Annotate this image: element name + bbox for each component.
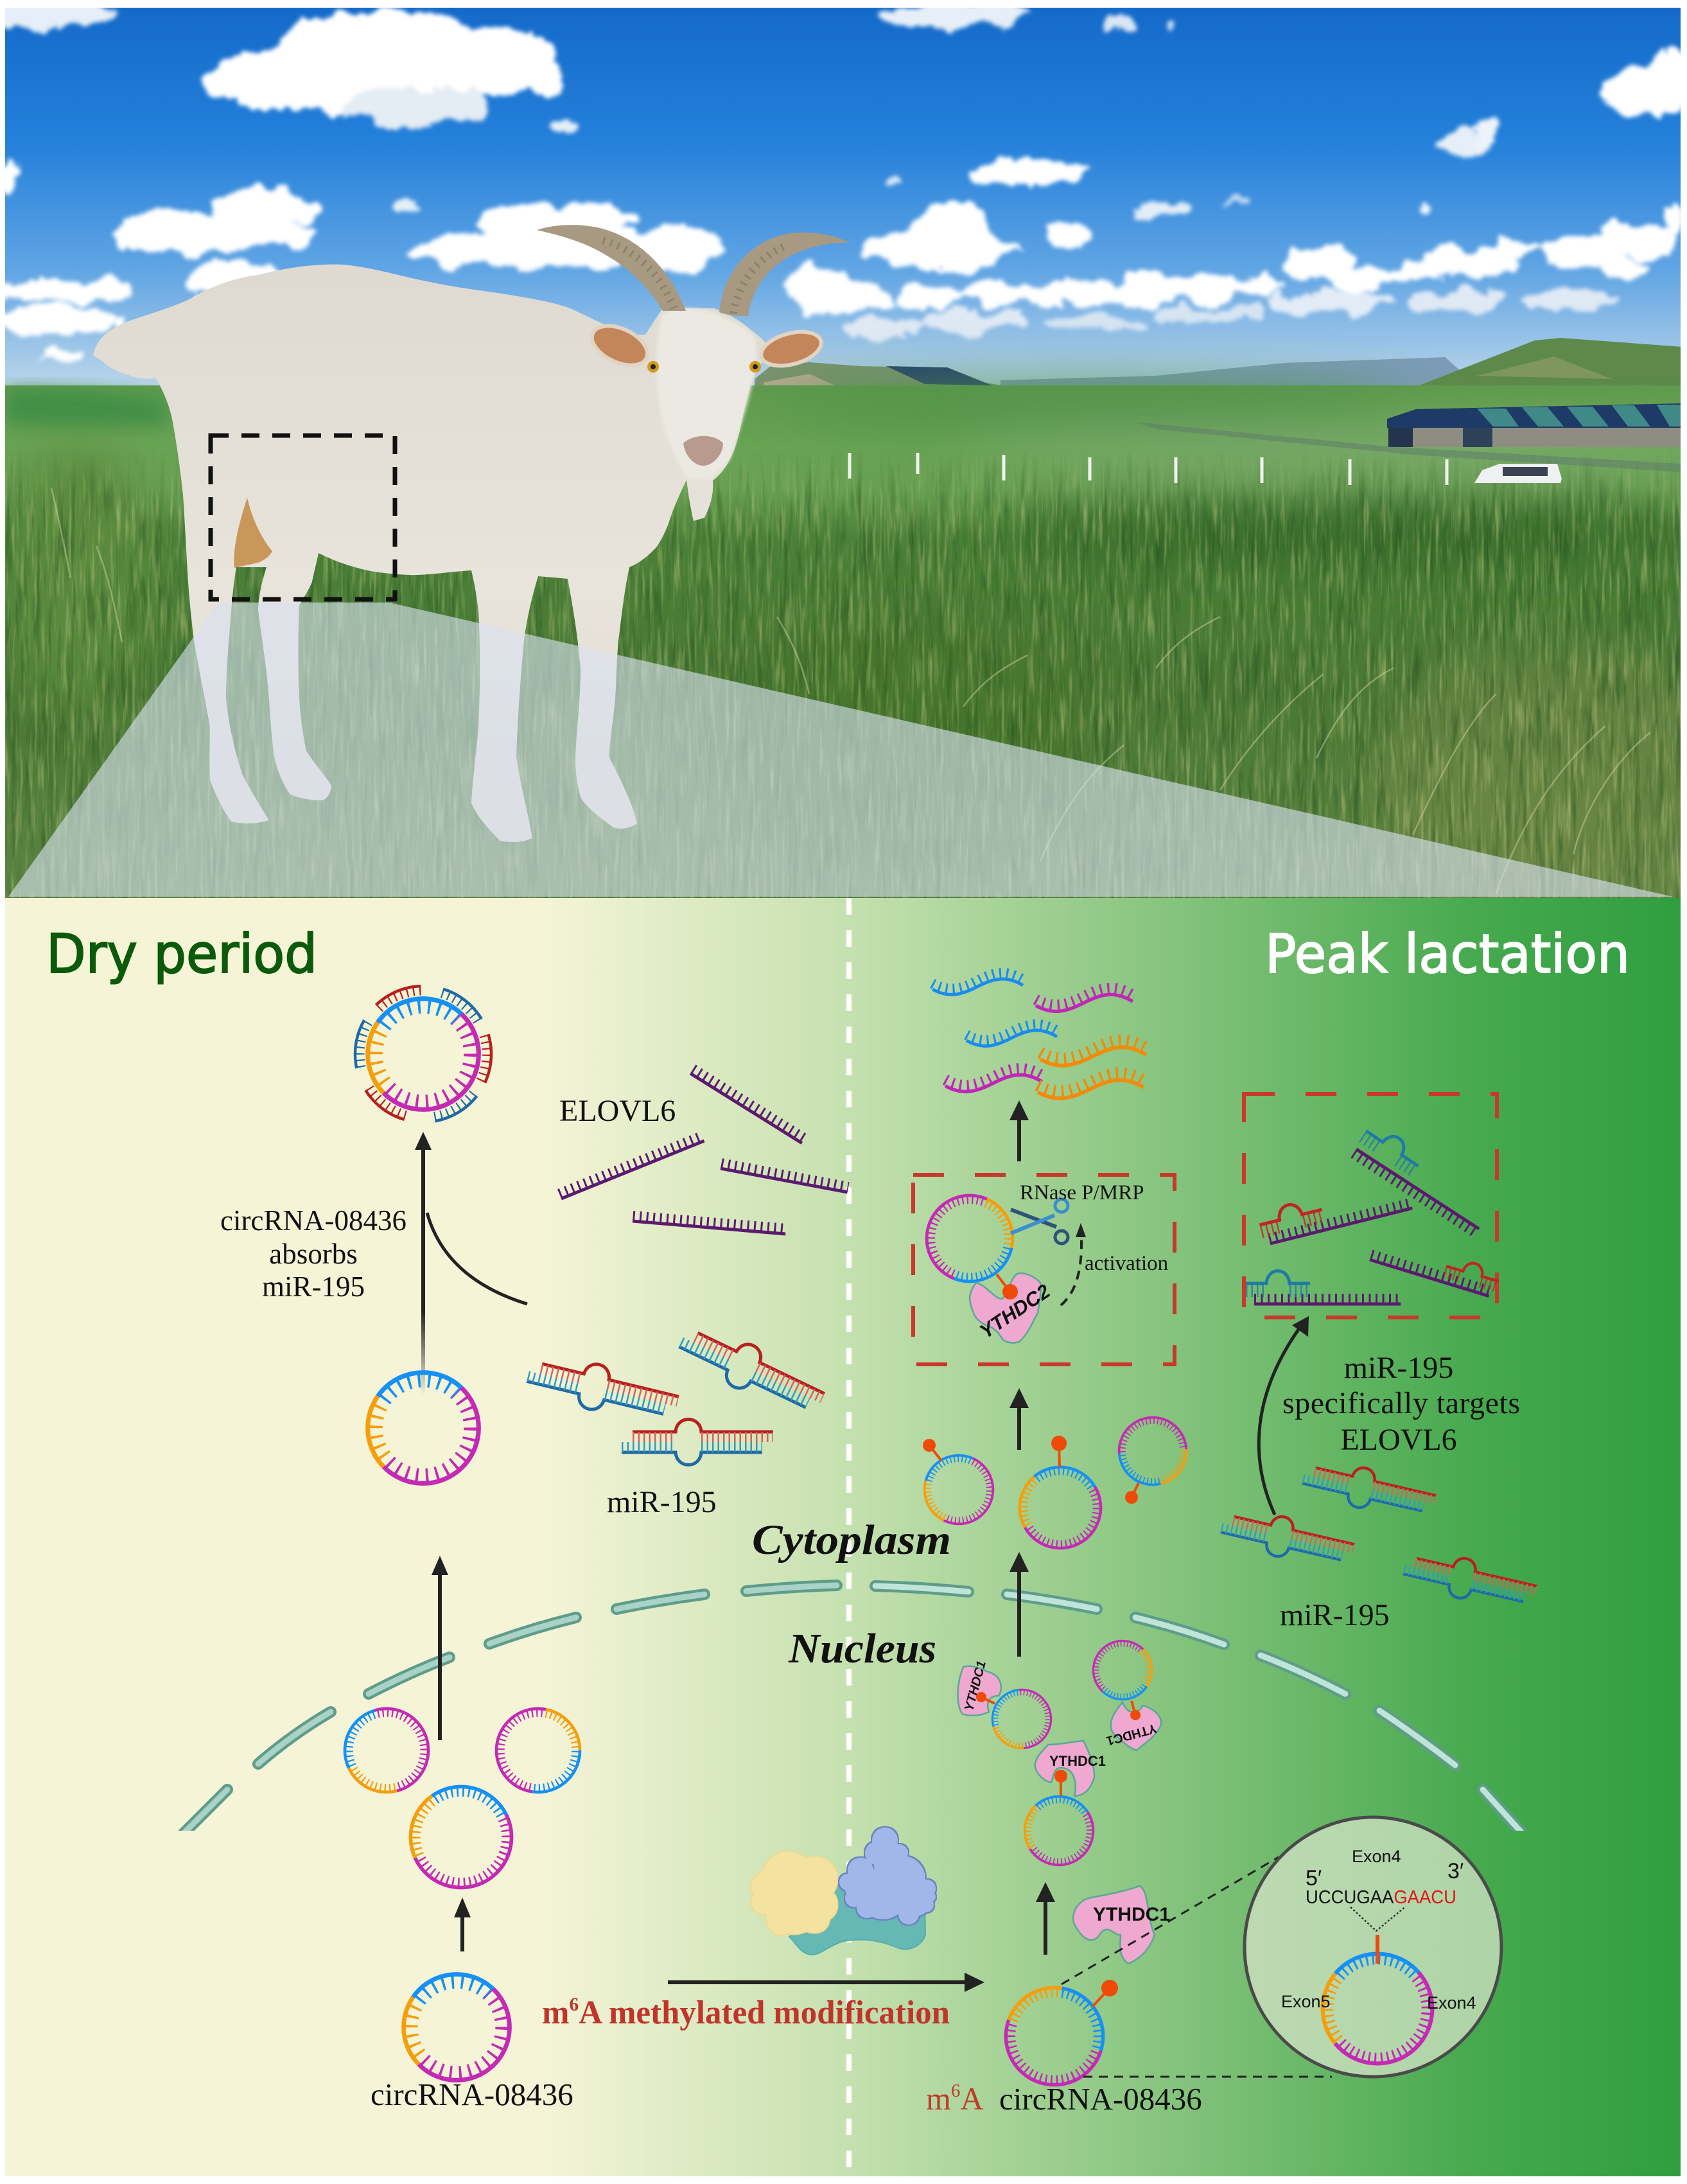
right horn xyxy=(719,233,850,316)
horn ridges xyxy=(597,239,787,313)
white car xyxy=(1474,464,1562,483)
eyes xyxy=(647,361,761,373)
label: circRNA-08436 absorbs miR-195: circRNA-08436 xyxy=(220,1204,406,1237)
blue subunit xyxy=(839,1827,936,1924)
strand 2 xyxy=(1269,1203,1412,1244)
YTHDC1 protein, large: YTHDC1 xyxy=(1093,1904,1170,1925)
sequence: UCCUGAAGAACU xyxy=(1306,1887,1456,1908)
dotted pointer xyxy=(1350,1907,1406,1931)
nuclear membrane xyxy=(173,1585,1532,1844)
left ear xyxy=(586,318,654,373)
labels: m6A circRNA-08436: A xyxy=(960,2081,984,2117)
label: 3 prime: 3′ xyxy=(1447,1859,1464,1883)
degraded RNA fragments xyxy=(932,973,1146,1098)
arrow: short, left xyxy=(454,1898,471,1951)
circRNA sponging miR-195 xyxy=(327,958,520,1150)
YTHDC1 complex 2: YTHDC1 xyxy=(1105,1721,1158,1748)
m6A site stem xyxy=(1376,1935,1379,1964)
circRNA in box xyxy=(900,1169,1039,1308)
writer protein complex xyxy=(751,1827,936,1955)
nose xyxy=(683,436,723,466)
label: miR-195 specifically targets ELOVL6: miR-195 xyxy=(1344,1351,1453,1385)
miR-195 duplexes, right xyxy=(1218,1455,1539,1615)
dashed activation arrow xyxy=(1061,1223,1086,1305)
miRNA arcs bound around the circle xyxy=(327,958,520,1150)
goat head highlight xyxy=(656,308,756,480)
label: miR-195, right: miR-195 xyxy=(1280,1598,1390,1632)
label: m6A methylated modification: m xyxy=(542,1995,570,2031)
strand 4 xyxy=(1254,1299,1401,1304)
wire fence xyxy=(1135,422,1681,472)
center dashed divider xyxy=(846,898,852,2176)
arrow: export, right xyxy=(1010,1552,1029,1657)
label: Nucleus: Nucleus xyxy=(788,1625,936,1672)
YTHDC1 protein, large xyxy=(1073,1886,1170,1964)
inset circRNA xyxy=(1304,1935,1451,2083)
left horn xyxy=(537,225,686,311)
label: Exon4 right: Exon4 xyxy=(1427,1993,1476,2012)
label: circRNA-08436: circRNA-08436 xyxy=(371,2077,573,2112)
label: Exon5: Exon5 xyxy=(1281,1992,1331,2011)
YTHDC1 complex 3 xyxy=(1009,1741,1109,1881)
arrow: up from m6A circRNA xyxy=(1036,1882,1055,1955)
YTHDC1 complex 1: YTHDC1 xyxy=(962,1659,989,1713)
sky xyxy=(5,8,1681,387)
label: circRNA-08436 absorbs miR-195: miR-195 xyxy=(262,1271,365,1303)
labels: m6A circRNA-08436: circRNA-08436 xyxy=(999,2081,1202,2117)
label: miR-195 specifically targets ELOVL6: ELOVL6 xyxy=(1340,1423,1457,1457)
strand 1 xyxy=(1354,1149,1479,1233)
YTHDC1 complex 2 xyxy=(1086,1634,1161,1750)
strand 3 xyxy=(1370,1255,1490,1296)
udder xyxy=(234,498,272,568)
grass field xyxy=(5,385,1681,899)
inhibition curve xyxy=(427,1213,527,1304)
arrow: export, left xyxy=(432,1556,448,1740)
m6A circRNA-08436 xyxy=(974,1956,1135,2117)
nuclear circRNAs, left xyxy=(316,1678,610,1917)
panel: mechanism background xyxy=(5,898,1681,2176)
label: miR-195 specifically targets ELOVL6: specifically targets xyxy=(1282,1386,1520,1420)
panel: YTHDC2 degradation box xyxy=(900,1169,1175,1364)
label: activation: activation xyxy=(1085,1252,1168,1275)
m6A mark xyxy=(997,1274,1018,1299)
label: 5 prime: 5′ xyxy=(1306,1866,1322,1890)
long arrow to m6A form xyxy=(668,1973,984,1992)
arrow: circRNA to sponge complex xyxy=(415,1132,432,1395)
distant hills xyxy=(755,338,1681,385)
circRNA free xyxy=(354,1359,492,1497)
YTHDC2 protein xyxy=(970,1273,1041,1343)
labels: m6A circRNA-08436: 6 xyxy=(951,2081,960,2101)
pale grass blades xyxy=(51,488,1650,893)
dashed selection box xyxy=(211,436,395,599)
goat body xyxy=(93,265,769,842)
label: Cytoplasm: Cytoplasm xyxy=(752,1517,951,1563)
label: Exon4 top: Exon4 xyxy=(1352,1847,1401,1866)
white fence posts xyxy=(850,453,1447,485)
heading: Peak lactation: Peak lactation xyxy=(1265,922,1630,985)
YTHDC1 complex 1 xyxy=(957,1659,1073,1770)
arrow: to fragments xyxy=(1010,1100,1029,1161)
miR-195 duplexes, left xyxy=(524,1317,830,1465)
label: m6A methylated modification: 6 xyxy=(569,1994,579,2015)
translucent zoom wedge xyxy=(8,603,1673,897)
label: YTHDC2: YTHDC2 xyxy=(975,1280,1054,1343)
left distant green hill xyxy=(5,389,167,427)
grass texture xyxy=(5,450,1681,899)
panel: miR-195 targeting box xyxy=(1244,1094,1501,1317)
ELOVL6 mRNA strands xyxy=(559,1069,848,1234)
light and dark patches of grass xyxy=(0,385,1687,931)
goat xyxy=(93,225,850,842)
label: RNase P/MRP: RNase P/MRP xyxy=(1020,1181,1144,1204)
clouds xyxy=(0,0,1687,360)
background photo: goat on grassland xyxy=(0,0,1687,931)
farm building xyxy=(1387,403,1681,447)
curved arrow: miR-195 targets ELOVL6 xyxy=(1259,1316,1309,1515)
label: ELOVL6: ELOVL6 xyxy=(559,1094,676,1128)
arrow: to box xyxy=(1010,1388,1029,1450)
magnified circRNA inset xyxy=(1245,1817,1501,2083)
label: circRNA-08436 absorbs miR-195: absorbs xyxy=(269,1238,358,1270)
scissors xyxy=(1011,1199,1068,1244)
zoom dashed lines xyxy=(1062,1857,1332,2077)
heading: Dry period: Dry period xyxy=(46,922,317,985)
right ear xyxy=(757,326,825,372)
cytoplasmic m6A circRNAs xyxy=(904,1392,1212,1569)
teal subunit xyxy=(789,1879,925,1955)
YTHDC1 complex 3: YTHDC1 xyxy=(1049,1753,1106,1769)
yellow subunit xyxy=(751,1852,837,1935)
circRNA-08436 unmodified xyxy=(391,1962,522,2093)
label: miR-195: miR-195 xyxy=(607,1485,717,1519)
labels: m6A circRNA-08436: m xyxy=(926,2081,951,2117)
label: m6A methylated modification: A methylated modification xyxy=(579,1995,950,2031)
